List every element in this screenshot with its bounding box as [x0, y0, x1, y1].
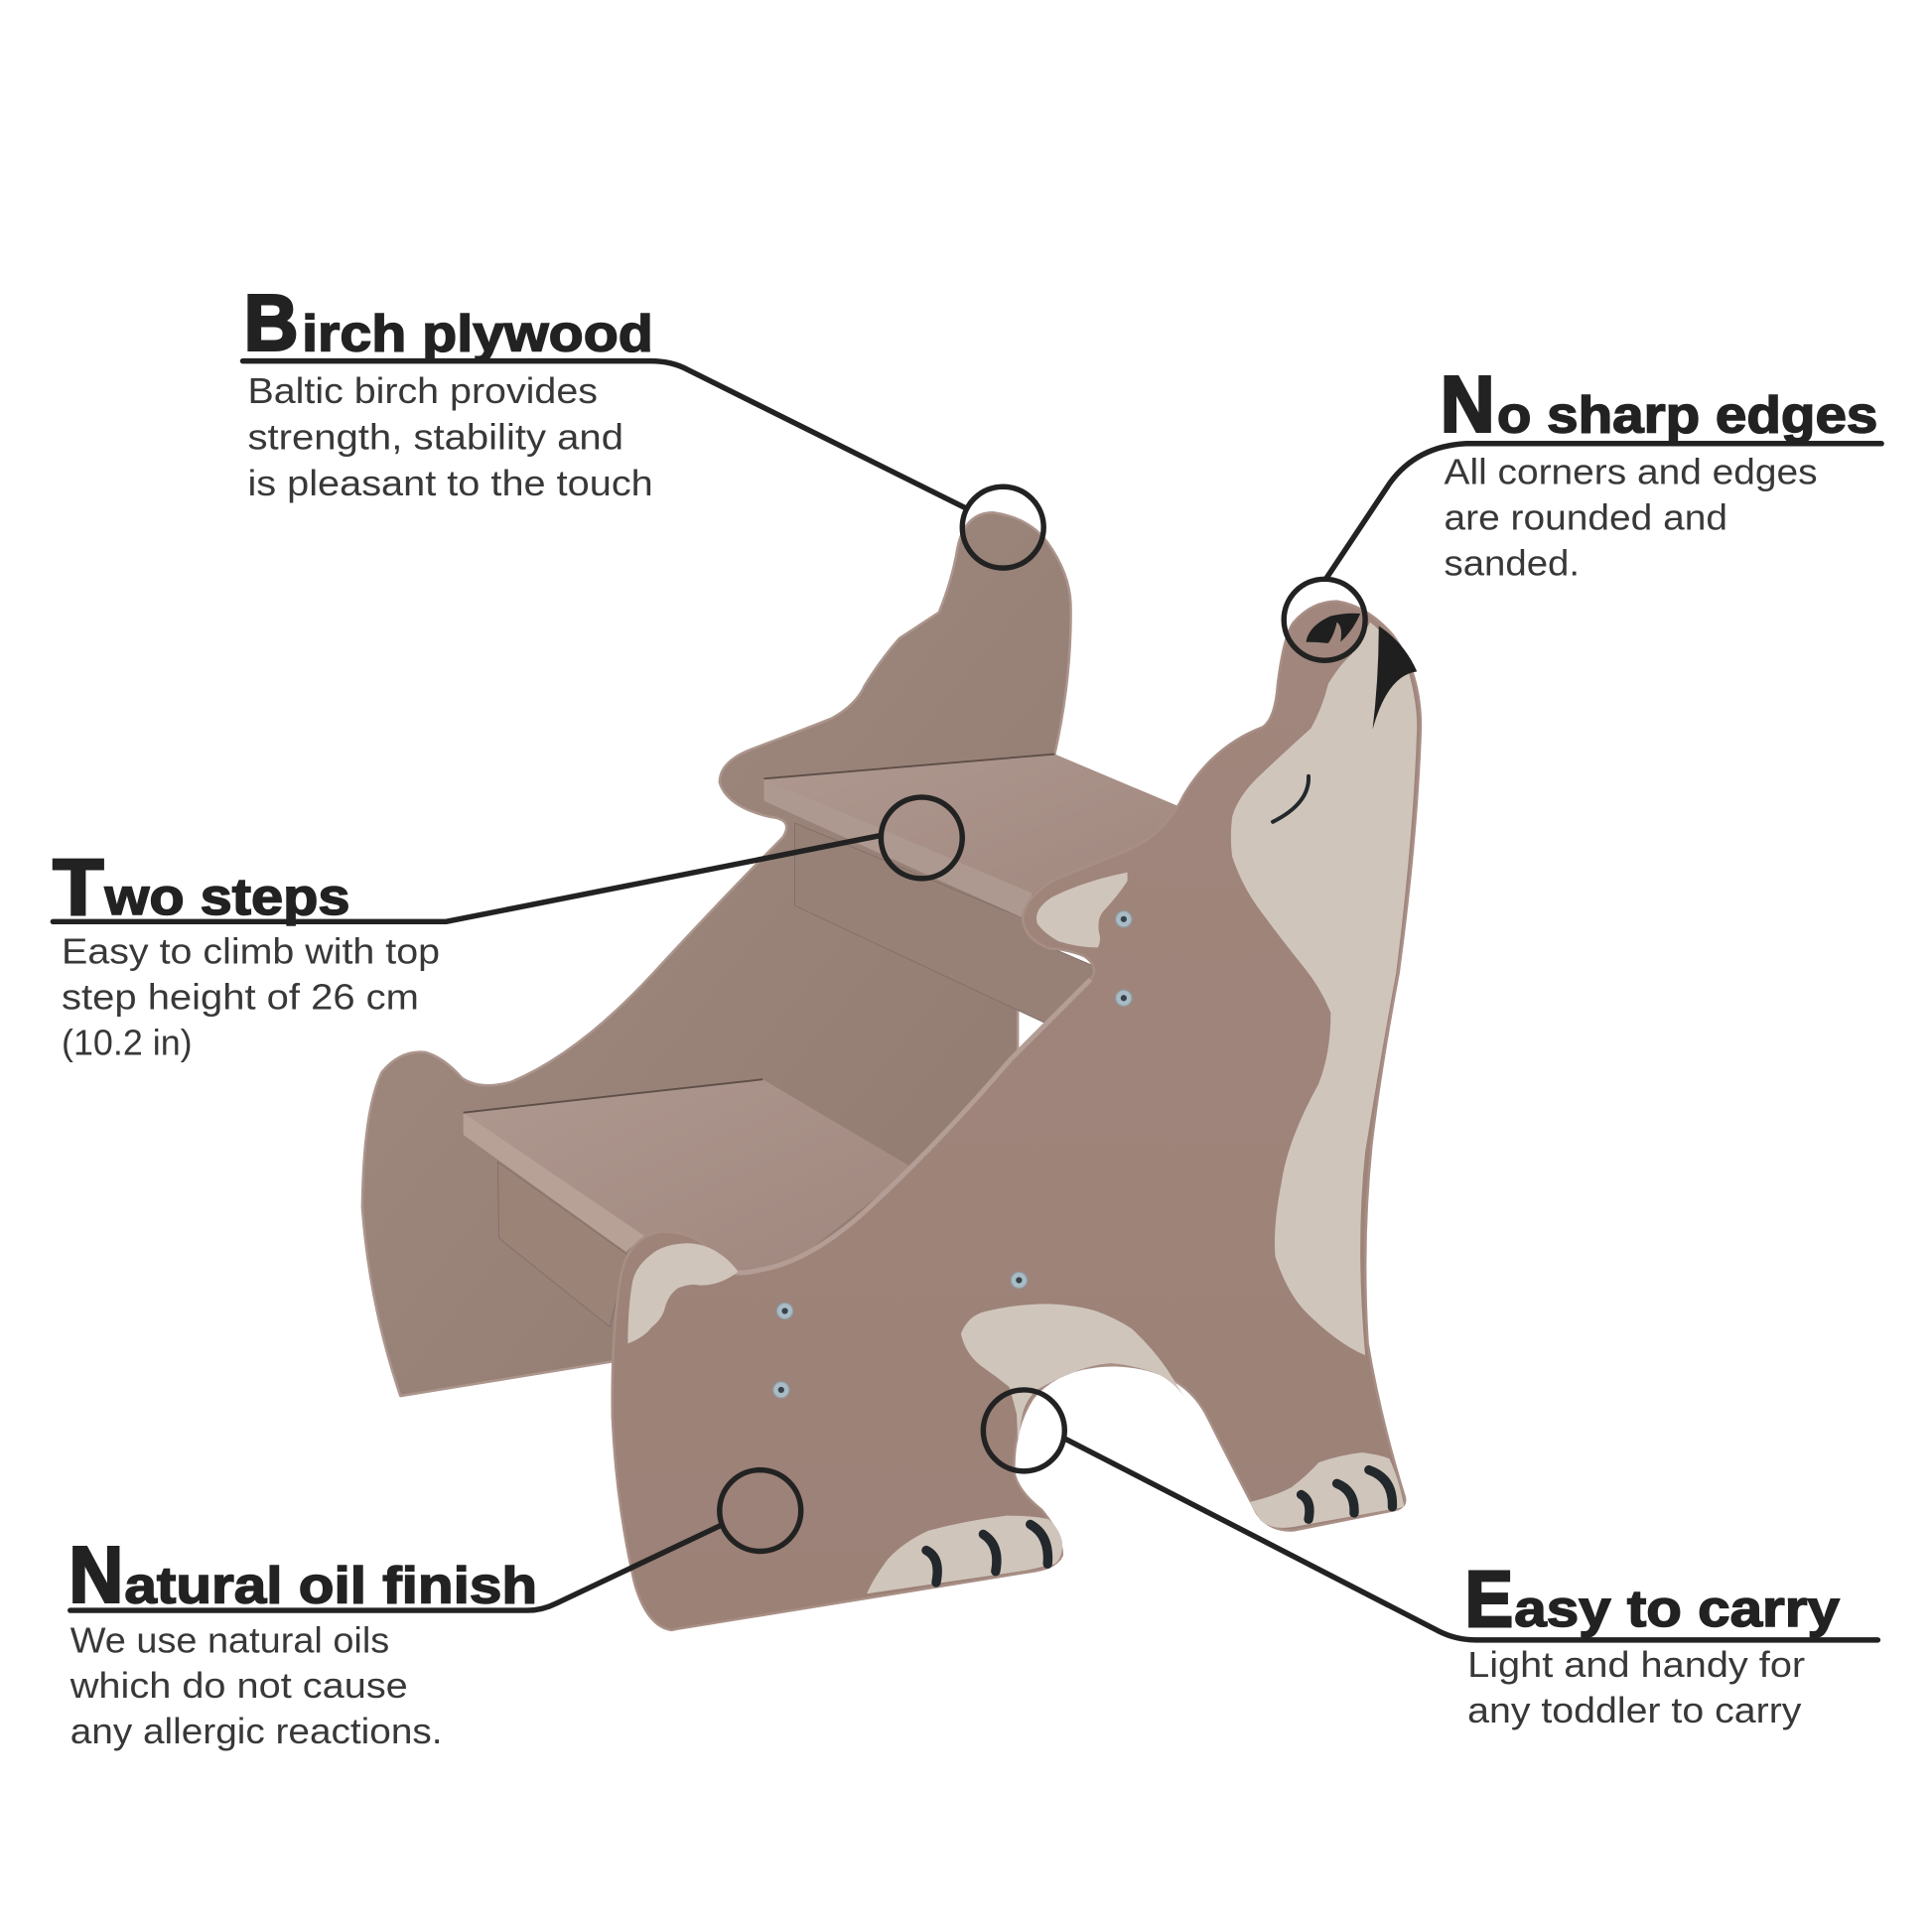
callout: Birch plywood: irch plywood — [302, 306, 653, 363]
cream haunch — [961, 1304, 1185, 1443]
rounded front panel edge — [727, 980, 1090, 1273]
callout: No sharp edges: N — [1441, 359, 1494, 448]
black nose marking — [1373, 625, 1417, 730]
upper step — [763, 755, 1180, 918]
callout: Two steps: (10.2 in) — [62, 1022, 193, 1062]
callout: Two steps — [53, 797, 962, 1062]
front panel — [613, 602, 1421, 1630]
cream lower ear — [627, 1243, 738, 1343]
lower step — [464, 1079, 913, 1272]
callout: Birch plywood: B — [244, 278, 298, 366]
front paw — [867, 1516, 1062, 1593]
callout: Easy to carry: any toddler to carry — [1467, 1690, 1801, 1730]
cream upper ear — [1036, 873, 1128, 947]
screws — [773, 911, 1132, 1398]
callout: Two steps: T — [53, 843, 103, 931]
callout: Birch plywood: Baltic birch provides — [247, 370, 598, 411]
callout: No sharp edges: sanded. — [1445, 543, 1580, 584]
callout: Birch plywood: strength, stability and — [247, 416, 623, 457]
callout: Natural oil finish: any allergic reactions. — [70, 1711, 443, 1751]
callout: Easy to carry — [983, 1390, 1877, 1730]
callout: No sharp edges: are rounded and — [1445, 497, 1727, 538]
eye — [1273, 776, 1309, 822]
black mouth marking — [1307, 614, 1360, 643]
callout: No sharp edges: All corners and edges — [1445, 452, 1818, 492]
callout: Birch plywood — [242, 278, 1043, 568]
callout: Natural oil finish: atural oil finish — [124, 1558, 537, 1615]
back panel — [362, 512, 1071, 1396]
callout: Two steps: Easy to climb with top — [62, 931, 440, 972]
callout: No sharp edges: o sharp edges — [1497, 387, 1877, 445]
callout: Easy to carry: E — [1465, 1555, 1513, 1643]
callout: Easy to carry: asy to carry — [1514, 1581, 1840, 1638]
upper riser — [794, 823, 1097, 1026]
callout: Natural oil finish: which do not cause — [69, 1665, 408, 1706]
rear paw — [1250, 1452, 1404, 1528]
lower riser — [497, 1162, 627, 1327]
wolf step stool — [362, 512, 1421, 1630]
callout: Natural oil finish: We use natural oils — [70, 1619, 389, 1660]
callout: Easy to carry: Light and handy for — [1467, 1644, 1805, 1685]
callout: Natural oil finish — [69, 1470, 801, 1751]
callout: Birch plywood: is pleasant to the touch — [247, 463, 653, 503]
callout: No sharp edges — [1284, 359, 1881, 660]
callout: Natural oil finish: N — [69, 1530, 123, 1618]
callout: Two steps: wo steps — [103, 869, 349, 926]
cream chest and muzzle — [1231, 622, 1417, 1355]
callout: Two steps: step height of 26 cm — [62, 976, 419, 1017]
